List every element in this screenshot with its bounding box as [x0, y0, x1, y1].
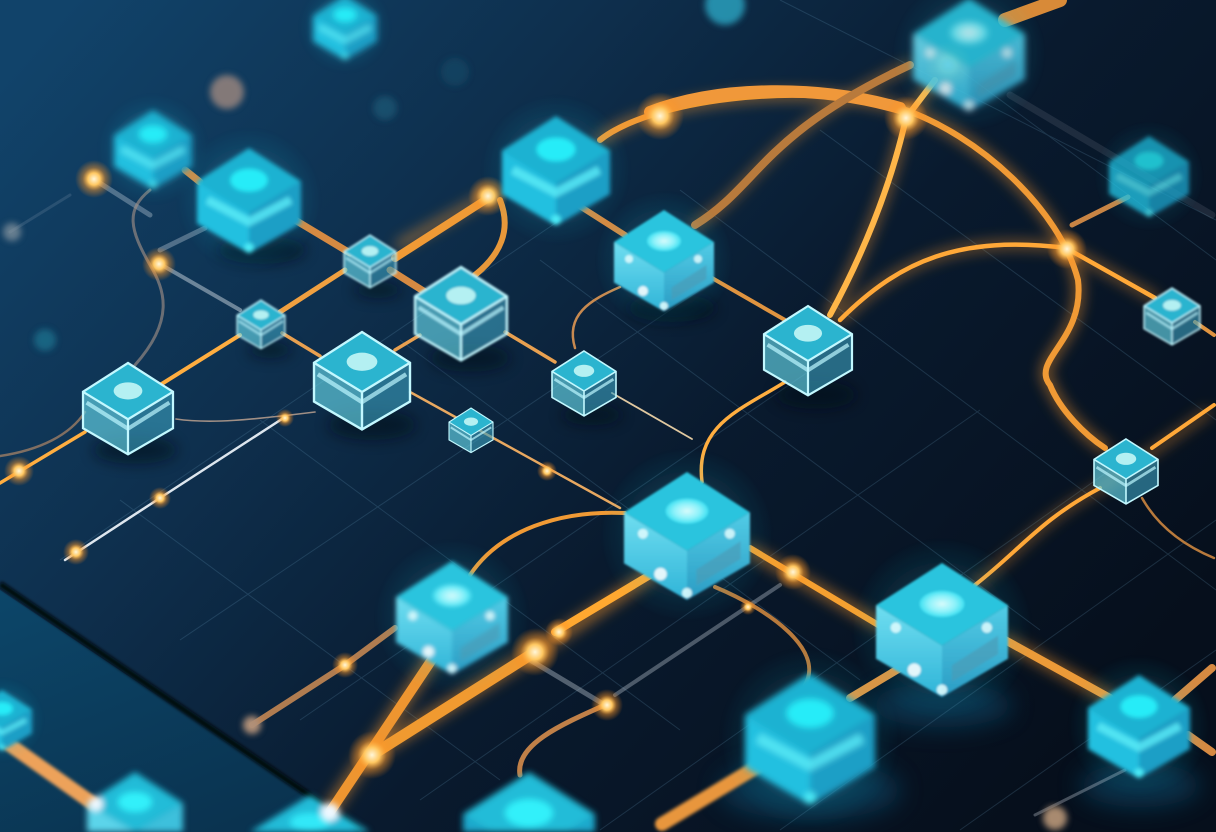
- cube: lower centre: [720, 648, 900, 828]
- blurred foreground thick strands: [10, 745, 760, 824]
- fan strand to top node: [830, 80, 935, 315]
- main arc top right: [600, 95, 1105, 448]
- orange glow underlay: [330, 65, 1208, 810]
- dim arc to top: [695, 65, 910, 225]
- cube: hub upper right glass: [764, 306, 852, 395]
- curve to right junction: [840, 245, 1155, 320]
- lower left brighter panel: [0, 590, 362, 832]
- panel edge shadow: [0, 584, 360, 830]
- cube: right glass: [1094, 439, 1158, 504]
- top right stem: [1005, 0, 1060, 20]
- cube: far right upper: [1094, 121, 1204, 231]
- cube: bottom far left: [87, 772, 183, 832]
- cube: bottom left: [250, 795, 370, 832]
- cube: centre glass: [415, 267, 507, 360]
- cube: small centre glass: [552, 351, 616, 416]
- cube: upper left large: [177, 128, 321, 272]
- cube: small upper left: [344, 235, 396, 288]
- cube: centre left glass: [314, 332, 410, 429]
- cube: far top left: [301, 0, 389, 71]
- cube: left glass: [83, 363, 173, 454]
- cube: right small glass: [1144, 288, 1200, 345]
- soft blue ambient patches: [720, 683, 1200, 820]
- upper arc bright core: [650, 91, 900, 112]
- cube: top right blurred: [892, 0, 1046, 131]
- centre links: [470, 513, 625, 575]
- cube: upper left blurred: [99, 95, 207, 203]
- cube: tiny centre glass: [449, 408, 493, 453]
- cube: lower centre left: [375, 540, 529, 694]
- cube contact shadows: [93, 236, 856, 464]
- upper left links: [185, 170, 425, 292]
- cube: lower right large: [851, 538, 1033, 720]
- cube: bottom centre: [463, 772, 595, 832]
- cube: left edge: [0, 679, 43, 761]
- cube: upper centre: [595, 191, 733, 329]
- cube: centre large bright: [600, 448, 774, 622]
- cube: small left: [237, 300, 285, 349]
- glowing orange junction nodes: [4, 41, 1087, 779]
- cube: top centre: [481, 95, 631, 245]
- cube: lower right edge: [1069, 656, 1209, 796]
